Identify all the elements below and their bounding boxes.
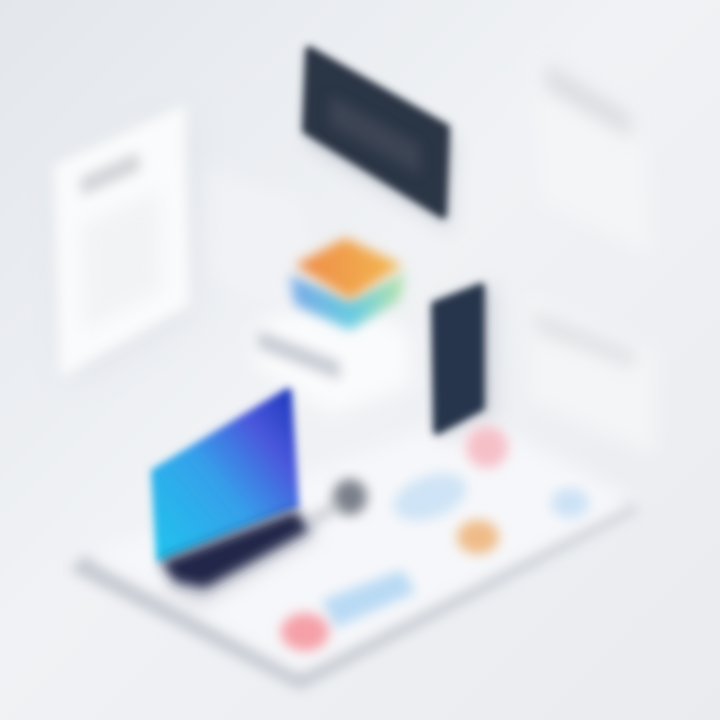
laptop base [160,510,310,588]
connector: laptop to dot [305,500,342,528]
icon: blue chip [387,464,473,530]
text block: lower right card heading [535,312,635,368]
text block: box label [258,330,340,380]
text block: top right card heading [545,62,632,138]
icon: pink badge [466,426,508,468]
icon: dark phone [435,285,495,442]
panel: faint center card [205,165,320,320]
panel: white stacked box [255,295,410,415]
icon: laptop [155,392,320,605]
bar: blue strip [322,570,416,628]
text block: dark card lines [330,95,420,175]
icon: red badge [281,613,329,651]
laptop screen [155,392,295,558]
icon: orange badge [457,520,499,554]
panel: faint top right card [535,55,652,255]
icon: light blue chip [551,488,589,518]
panel: dark top card [306,50,455,230]
text block: left card heading [80,152,140,196]
icon: colorful cube [290,238,405,330]
icon: gray dot [333,479,367,515]
panel: left white card [54,105,195,385]
panel: faint lower right card [528,295,655,455]
panel: bottom platform [70,412,640,690]
text block: left card lines [82,190,162,330]
